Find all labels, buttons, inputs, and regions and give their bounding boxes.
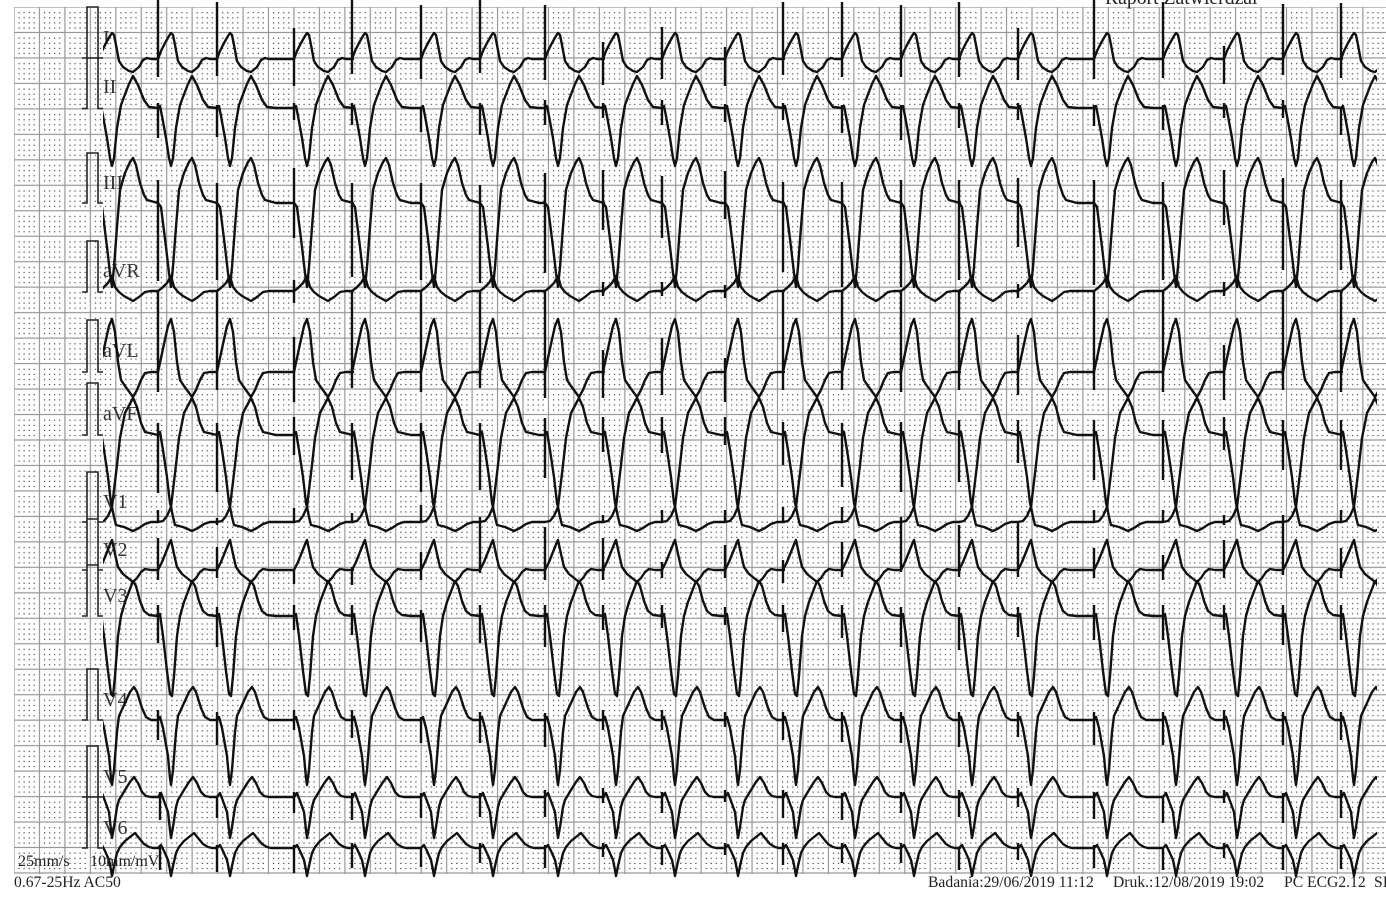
scale labels: paper speed and gain: 10mm/mV [90,853,160,870]
footer: software version: PC ECG2.12 [1284,874,1366,891]
calibration pulses [82,7,103,848]
trace: lead V6 [99,833,1386,876]
lead labels: I [103,27,110,49]
trace: lead V4 [99,687,1386,785]
lead labels: aVF [103,403,137,425]
trace: lead III [99,158,1386,287]
trace: lead I [99,0,1386,86]
scale labels: paper speed and gain [18,853,160,870]
lead labels: V5 [103,766,127,788]
trace: lead V3 [99,581,1386,696]
lead labels: III [103,172,123,194]
lead labels: V6 [103,817,127,839]
lead labels: V3 [103,585,127,607]
lead labels: V4 [103,689,127,711]
lead labels: aVL [103,340,139,362]
lead labels: V1 [103,491,127,513]
trace: lead aVL [99,319,1386,402]
trace: lead aVR [99,276,1386,335]
trace: lead V2 [99,538,1386,585]
footer: print date: Druk.:12/08/2019 19:02 [1113,874,1264,891]
trace: lead aVF [99,398,1386,507]
lead labels: aVR [103,260,140,282]
trace: lead V5 [99,777,1386,838]
footer: exam date: Badania:29/06/2019 11:12 [928,874,1094,891]
lead labels [103,27,140,839]
footer: filter settings: 0.67-25Hz AC50 [14,874,121,891]
scale labels: paper speed and gain: 25mm/s [18,853,70,870]
trace: lead II [99,76,1386,166]
lead labels: V2 [103,539,127,561]
lead labels: II [103,76,116,98]
trace: lead V1 [99,505,1386,550]
